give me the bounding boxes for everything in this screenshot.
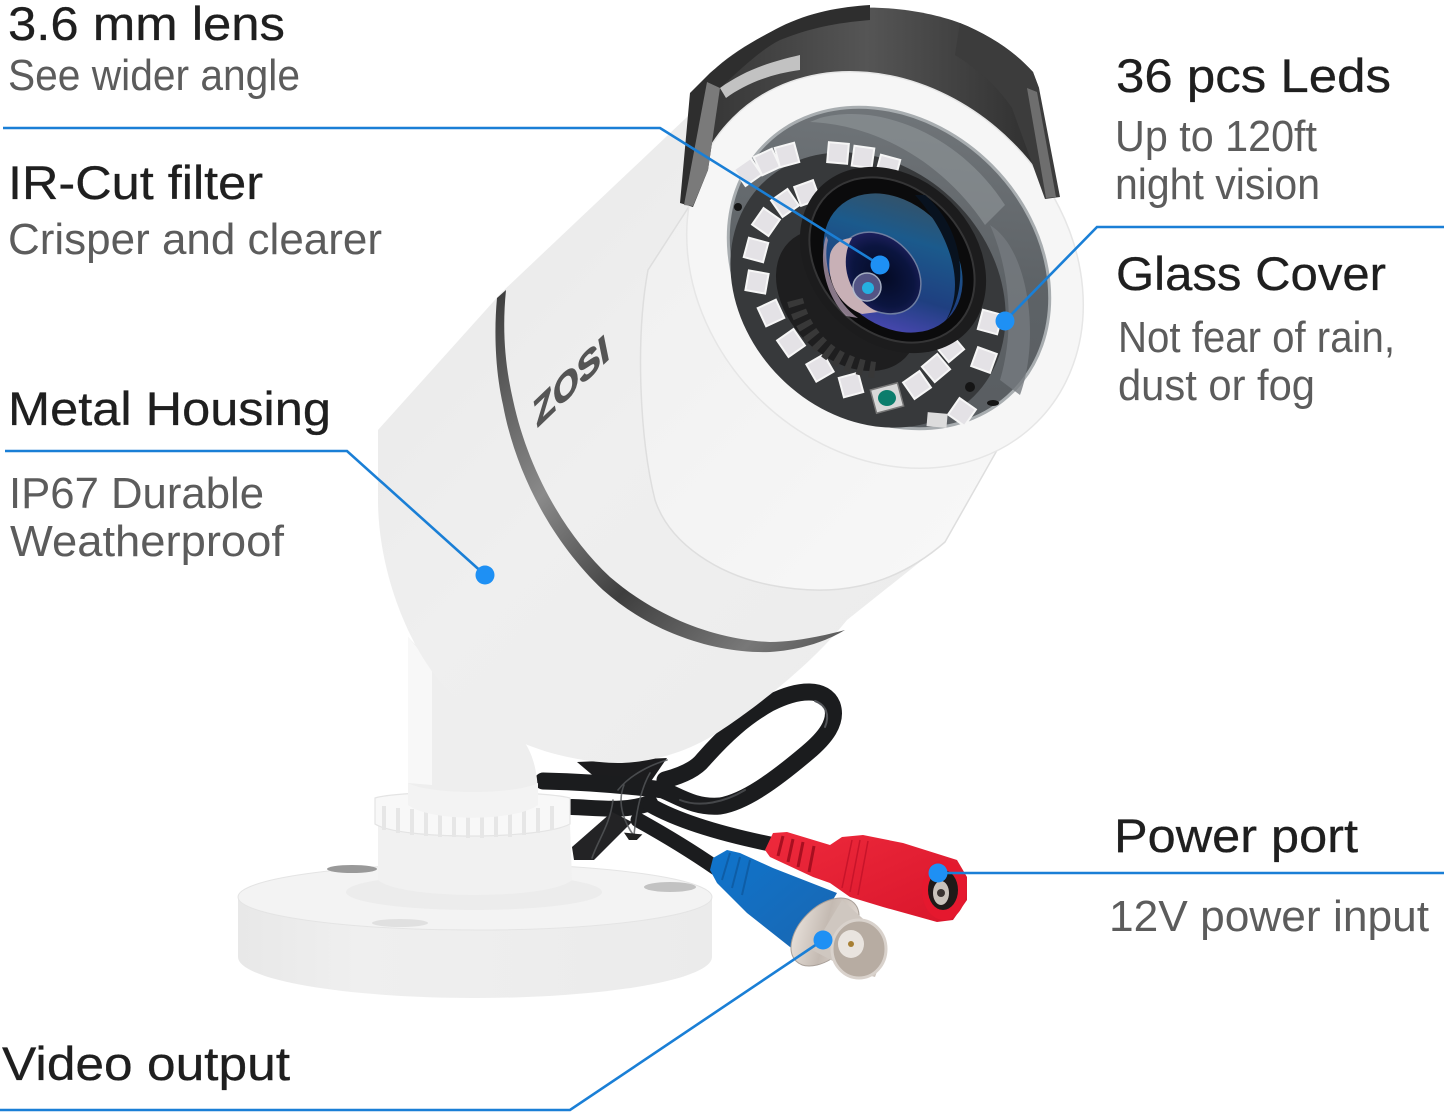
mounting base [238, 637, 712, 998]
callout line: video output [0, 930, 832, 1110]
text block: IR-Cut filter: IR-Cut filter [8, 156, 263, 209]
camera body [378, 100, 1000, 763]
base disc [238, 864, 712, 998]
text block: Power port: 12V power input [1109, 892, 1429, 941]
text block: 36 pcs Leds: 36 pcs Leds [1116, 49, 1391, 102]
text block: Metal Housing: IP67 Durable [9, 469, 264, 518]
text block: 3.6 mm lens [8, 0, 300, 100]
front shroud [641, 205, 1000, 590]
text block: Metal Housing: Metal Housing [8, 382, 331, 435]
lens barrel [748, 201, 946, 399]
text block: Glass Cover: Glass Cover [1116, 247, 1386, 300]
lens [762, 129, 1024, 391]
sun visor hood [690, 8, 1045, 200]
stem [408, 637, 538, 818]
text block: Power port [1109, 809, 1429, 941]
callout line: glass cover [996, 227, 1444, 330]
LED circuit board [674, 96, 1062, 484]
cables [543, 692, 833, 868]
text block: Glass Cover: Not fear of rain, [1118, 313, 1395, 362]
text block: Metal Housing [8, 382, 331, 566]
callout line: 3.6 mm lens [3, 128, 890, 274]
power connector: red [765, 832, 967, 922]
visor left arm [680, 5, 870, 207]
text block: Glass Cover: dust or fog [1118, 361, 1315, 410]
cylinder [378, 825, 572, 895]
cable tie [572, 760, 667, 860]
text block: 36 pcs Leds [1115, 49, 1391, 209]
knurled nut [375, 792, 570, 838]
front ring [606, 0, 1164, 549]
metal band [495, 290, 845, 652]
text block: IR-Cut filter [8, 156, 382, 264]
text block: IR-Cut filter: Crisper and clearer [8, 215, 382, 264]
text block: 36 pcs Leds: night vision [1115, 160, 1320, 209]
visor right arm [955, 23, 1060, 199]
callout line: power port [928, 864, 1444, 882]
glass cover opening [663, 42, 1115, 494]
text block: Metal Housing: Weatherproof [10, 517, 285, 566]
text block: Glass Cover [1116, 247, 1395, 410]
brand logo: ZOSI [530, 325, 612, 436]
callout line: metal housing [5, 451, 494, 584]
LED array [734, 142, 1002, 428]
text block: Power port: Power port [1114, 809, 1358, 862]
text block: Video output: Video output [2, 1037, 290, 1090]
video connector: blue BNC [710, 850, 886, 979]
text block: 36 pcs Leds: Up to 120ft [1115, 112, 1317, 161]
text block: 3.6 mm lens: See wider angle [8, 51, 300, 100]
